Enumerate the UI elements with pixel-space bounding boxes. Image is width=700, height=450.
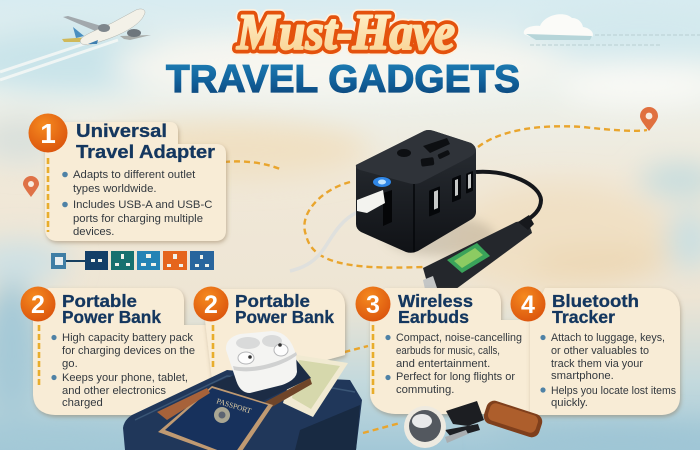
- text: tracker bullets: quickly.: [551, 397, 588, 409]
- icon: travel bag: [123, 370, 362, 450]
- icon: tracker and keys: [404, 399, 544, 448]
- icon: black cable to dongle: [476, 172, 541, 224]
- heading: Wireless Earbuds: Wireless: [398, 291, 473, 311]
- text: power bank bullets: for charging devices on the: [62, 345, 195, 357]
- text: power bank bullets: Keeps your phone, tablet,: [62, 372, 188, 384]
- heading: Bluetooth Tracker: Bluetooth: [552, 291, 639, 311]
- title: Travel Gadgets: TRAVEL GADGETS: [166, 58, 520, 101]
- heading: Wireless Earbuds: Earbuds: [398, 307, 469, 327]
- text: power bank bullets: [51, 332, 195, 409]
- text: power bank bullets: High capacity battery pack: [62, 332, 193, 344]
- number badge 3: 3: [366, 291, 380, 319]
- icon: wallet and leather tag: [210, 352, 312, 412]
- text: power bank bullets: go.: [62, 358, 78, 370]
- heading: Bluetooth Tracker: [552, 291, 639, 327]
- heading: Universal Travel Adapter: Universal: [76, 120, 167, 141]
- text: adapter bullets: Adapts to different outlet: [73, 169, 196, 181]
- icon: passport: PASSPORT: [215, 396, 253, 416]
- heading: Wireless Earbuds: [398, 291, 473, 327]
- title: Must-Have: Must-Have: [236, 5, 455, 61]
- text: tracker bullets: Helps you locate lost items: [551, 385, 676, 397]
- text: adapter bullets: Includes USB-A and USB-C: [73, 199, 212, 211]
- heading: Bluetooth Tracker: Tracker: [552, 307, 615, 327]
- number badge 1: 1: [40, 118, 56, 149]
- icon: power bank dongle: [423, 215, 534, 294]
- number badge 2 second: [194, 286, 228, 322]
- number badge 4: 4: [521, 291, 535, 319]
- icon: earbuds case: [226, 331, 297, 393]
- icon: map pin right: [640, 107, 658, 131]
- heading: Universal Travel Adapter: [76, 120, 215, 162]
- panel 1: Universal Travel Adapter: [28, 114, 226, 241]
- icon: white USB cable: [290, 212, 358, 271]
- text: earbuds bullets: Perfect for long flights or: [396, 371, 515, 383]
- text: earbuds bullets: and entertainment.: [396, 358, 490, 370]
- text: earbuds bullets: commuting.: [396, 384, 454, 396]
- text: earbuds bullets: earbuds for music, calls,: [396, 345, 500, 357]
- heading: Portable Power Bank: Power Bank: [62, 307, 161, 327]
- heading: Portable Power Bank: [62, 291, 161, 327]
- number badge 2 second: 2: [204, 291, 218, 319]
- number badge 2: [20, 286, 56, 322]
- text: tracker bullets: Attach to luggage, keys,: [551, 332, 665, 344]
- icon: passport: [157, 386, 273, 450]
- number badge 4: [510, 286, 546, 322]
- text: tracker bullets: or other valuables to: [551, 345, 649, 357]
- heading: Portable Power Bank second: Portable: [235, 291, 310, 311]
- heading: Universal Travel Adapter: Travel Adapter: [76, 141, 215, 162]
- text: tracker bullets: smartphone.: [551, 370, 614, 382]
- heading: Portable Power Bank: Portable: [62, 291, 137, 311]
- text: tracker bullets: [540, 332, 676, 409]
- text: tracker bullets: track them via your: [551, 358, 643, 370]
- icon: airplane with contrails: [0, 9, 151, 80]
- icon: travel map: [283, 355, 348, 417]
- panel 4: Bluetooth Tracker: [510, 286, 680, 415]
- text: power bank bullets: and other electronics: [62, 385, 166, 397]
- text: adapter bullets: [62, 169, 212, 238]
- number badge 3: [356, 286, 390, 322]
- panel 2b: Portable Power Bank heading card: [194, 286, 345, 380]
- number badge 2: 2: [31, 291, 45, 319]
- title: Must-Have: Must-Have: [236, 5, 455, 61]
- panel 2: Portable Power Bank bullets: [20, 286, 215, 415]
- panel 3: Wireless Earbuds: [356, 286, 535, 414]
- heading: Portable Power Bank second: Power Bank: [235, 307, 334, 327]
- icon strip: plug types: [51, 251, 214, 270]
- heading: Portable Power Bank second: [235, 291, 334, 327]
- icon: universal travel adapter cube: [356, 130, 495, 256]
- text: earbuds bullets: Compact, noise-cancelling: [396, 332, 522, 344]
- icon: map pin left: [23, 176, 39, 197]
- text: adapter bullets: ports for charging multiple: [73, 213, 203, 225]
- text: adapter bullets: devices.: [73, 226, 114, 238]
- title: Must-Have: Must-Have: [236, 5, 455, 61]
- text: power bank bullets: charged: [62, 397, 103, 409]
- text: adapter bullets: types worldwide.: [73, 183, 157, 195]
- icon: cloud top right: [524, 14, 700, 45]
- number badge 1: [28, 114, 68, 152]
- text: earbuds bullets: [385, 332, 522, 396]
- route: dashed flight paths: [192, 126, 647, 433]
